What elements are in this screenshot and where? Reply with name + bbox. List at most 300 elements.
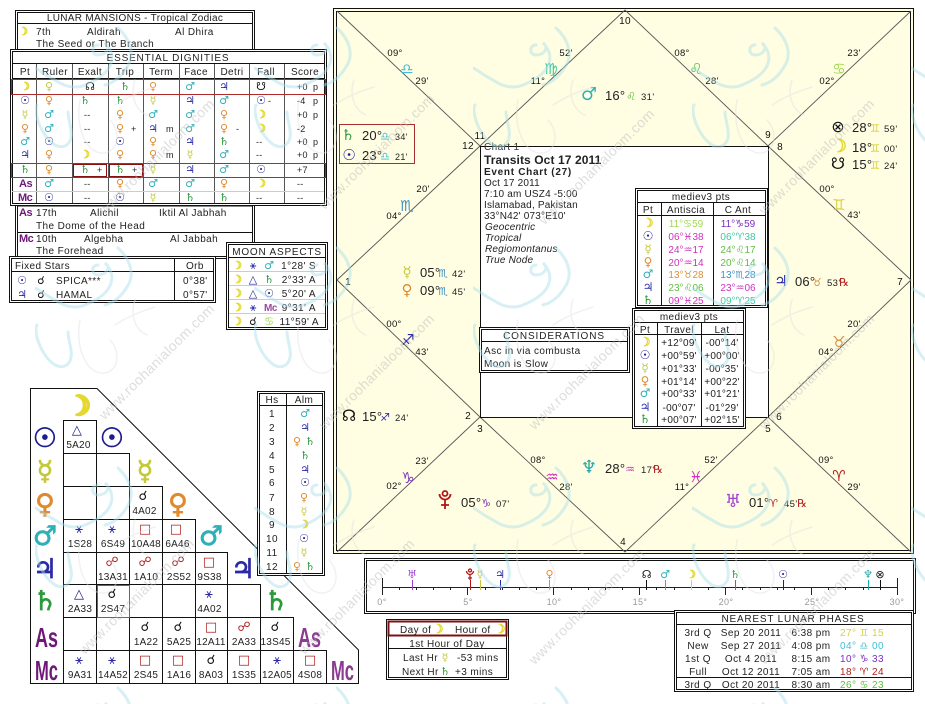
panel: nearest lunar phases (674, 610, 914, 692)
latitude values: -00°35' (706, 364, 738, 375)
cusp degrees: 02° (386, 481, 402, 492)
aspect symbols: ☍ (171, 555, 185, 570)
phase dates: Oct 20 2011 (722, 680, 780, 691)
panel: north indian chart (334, 8, 914, 554)
planet glyphs: diagonal labels: ☉ (100, 423, 124, 454)
scores and exalt dashes: +0 (297, 150, 308, 160)
planet column: ♀ (641, 374, 649, 388)
phase names: Full (689, 667, 707, 678)
aspect symbols: ☌ (174, 620, 182, 635)
chart subtitle: Event Chart (27) (484, 167, 572, 178)
planet: sun: 21' (395, 152, 408, 162)
axis labels: As (19, 178, 32, 190)
cusp degrees: 00° (819, 184, 835, 195)
last hour: ☿ (442, 651, 448, 664)
row: jupiter: ♀ (116, 148, 124, 161)
aspect values: 10A48 (131, 539, 161, 550)
planet: north node: ♐ (380, 411, 390, 424)
planet column: ☿ (644, 242, 652, 256)
antiscia values: 11°♋59 (669, 219, 704, 230)
planet: sun: ♎ (380, 150, 390, 163)
row: moon: ♂ (185, 80, 195, 93)
aspect rows: ♋ (264, 315, 274, 328)
planet: sun: 23° (362, 148, 382, 163)
planet: saturn: 34' (395, 132, 408, 142)
scores and exalt dashes: -- (84, 110, 90, 120)
antiscia values: 09°♓25 (668, 296, 704, 307)
event data: Islamabad, Pakistan (484, 200, 578, 211)
planet: part of fortune: ♊ (870, 122, 880, 135)
aspect symbols: ☌ (207, 653, 215, 668)
moon mansion: ☽ (18, 25, 28, 38)
house numbers: 7 (897, 277, 903, 288)
panel: essential dignities (10, 50, 326, 206)
antiscia values: 06°♓38 (668, 232, 704, 243)
chart settings: Regiomontanus (485, 244, 558, 255)
antiscia values: 13°♉28 (668, 270, 704, 281)
row: venus: ♀ (220, 122, 228, 135)
aspect symbols: ☌ (141, 620, 149, 635)
planet: saturn: ♎ (380, 130, 390, 143)
latitude values: +00°22' (704, 377, 740, 388)
row: jupiter: ♀ (45, 148, 53, 161)
aspect rows: ♂ (264, 259, 274, 272)
row: ascendant: ♂ (44, 177, 54, 190)
house numbers: 9 (765, 130, 771, 141)
fixed stars heading: Fixed Stars (15, 261, 70, 272)
panel: moon aspects (226, 242, 328, 330)
row: mercury: ♂ (44, 108, 54, 121)
aspect symbols: □ (139, 522, 151, 537)
planet: venus: ♏ (438, 285, 448, 298)
scores and exalt dashes: + (132, 165, 137, 175)
house numbers: 6 (776, 412, 782, 423)
planet: venus: ♀ (402, 281, 412, 299)
icon: pluto (440, 491, 450, 509)
phase dates: Sep 27 2011 (721, 641, 781, 652)
planet glyphs: row labels: ♄ (33, 586, 57, 617)
aspect values: 6A46 (165, 539, 190, 550)
scores and exalt dashes: +0 (297, 137, 308, 147)
planet column: ☉ (643, 229, 653, 243)
aspect orbs: 1°28' S (281, 261, 316, 272)
watermark: website address: www.roohanialoom.com (315, 310, 437, 433)
house numbers: 6 (269, 478, 275, 489)
planet glyphs: diagonal labels: ☽ (67, 391, 91, 422)
watermark: website address: www.roohanialoom.com (525, 545, 647, 668)
planet: neptune: ℞ (653, 463, 663, 476)
row: jupiter: ♂ (219, 148, 229, 161)
row: jupiter: ☿ (187, 148, 193, 161)
planet: north node: 15° (362, 409, 382, 424)
cusp degrees: 08° (530, 455, 546, 466)
row: midheaven: ♄ (219, 191, 229, 204)
aspect orbs: 5°20' A (282, 289, 316, 300)
watermark: website address: www.roohanialoom.com (755, 310, 877, 433)
cusp degrees: 09° (387, 48, 403, 59)
aspect symbols: ⚹ (273, 653, 281, 668)
chart title: Transits Oct 17 2011 (484, 153, 602, 167)
ruler planets: ☿ (477, 568, 483, 581)
aspect symbols: ☌ (139, 489, 147, 504)
label: Mc diagonal: Mc (331, 655, 354, 686)
row: mars: ♂ (20, 135, 30, 148)
row: mercury: ♀ (116, 108, 124, 121)
row: mercury: ♂ (185, 108, 195, 121)
planet column: ♄ (640, 412, 650, 426)
cusp signs: ♐ (401, 331, 415, 349)
row: saturn: ☿ (150, 163, 156, 176)
aspect rows: ☽ (232, 315, 242, 328)
antiscia values: 20°♒14 (668, 258, 704, 269)
day and hour rulers: ☽ (433, 622, 443, 636)
aspect values: 1S35 (232, 670, 256, 681)
cusp degrees: 52' (704, 455, 718, 466)
ruler scale labels: 15° (633, 597, 647, 607)
aspect symbols: ☌ (271, 620, 279, 635)
planet: part of fortune: ⊗ (831, 117, 845, 136)
next hour: Next Hr (402, 667, 439, 678)
scores and exalt dashes: -- (84, 179, 90, 189)
aspect values: 13A31 (98, 572, 128, 583)
row: saturn: ♃ (185, 163, 195, 176)
row: saturn: ♄ (80, 163, 90, 176)
house numbers: 8 (269, 507, 275, 518)
house rulers: ♄ (305, 560, 315, 573)
aspect values: 4S08 (298, 670, 322, 681)
row: moon: ♃ (219, 80, 229, 93)
column headings: Term (149, 67, 173, 78)
house rulers: ☉ (300, 476, 310, 489)
planet: south node: ☋ (831, 154, 845, 173)
aspect values: 5A20 (66, 440, 91, 451)
column headings: Face (184, 67, 208, 78)
next hour: ♄ (440, 665, 450, 678)
aspect values: 2S52 (167, 572, 191, 583)
house rulers: ☿ (301, 505, 307, 518)
aspect rows: ⚹ (250, 259, 257, 272)
antiscia headings: Pt (643, 205, 653, 216)
row: venus: ♃ (148, 122, 158, 135)
planet: part of fortune: 28° (852, 120, 872, 135)
house numbers: 5 (269, 465, 275, 476)
antiscia headings: Antiscia (667, 205, 705, 216)
aspect rows: ☽ (232, 259, 242, 272)
aspect rows: ☌ (249, 315, 257, 328)
ruler scale labels: 5° (463, 597, 473, 607)
last hour: Last Hr (403, 653, 438, 664)
aspect values: 1A16 (167, 670, 191, 681)
phase positions: 26° ♋ 23 (840, 680, 884, 691)
row: midheaven: ☉ (44, 191, 54, 204)
event data: 7:10 am USZ4 -5:00 (484, 189, 578, 200)
row: ascendant: ♂ (148, 177, 158, 190)
scores and exalt dashes: -- (256, 137, 262, 147)
ruler planets: ☽ (686, 568, 696, 581)
moon mansion: Al Dhira (175, 27, 214, 38)
row: sun: ☿ (150, 94, 156, 107)
panel: considerations (480, 328, 630, 372)
aspect orbs: 9°31' A (282, 303, 316, 314)
cusp signs: ♑ (401, 469, 415, 487)
aspect symbols: ☌ (108, 587, 116, 602)
almuten headings: Hs (265, 395, 279, 406)
aspect rows: △ (249, 287, 258, 300)
scores and exalt dashes: m (166, 124, 174, 134)
planet: north node: 24' (395, 413, 409, 424)
travel headings: Lat (714, 325, 730, 336)
midheaven mansion: Al Jabbah (170, 234, 218, 245)
planet: moon: 00' (884, 144, 898, 155)
cusp signs: ♈ (832, 467, 846, 485)
row: venus: ♂ (185, 122, 195, 135)
planet: uranus: ℞ (797, 497, 807, 510)
row: sun: ♄ (80, 94, 90, 107)
house rulers: ☉ (299, 532, 309, 545)
row: sun: ☉ (20, 94, 30, 107)
planet column: ☿ (641, 361, 649, 375)
column headings: Detri (220, 67, 244, 78)
house numbers: 4 (620, 537, 626, 548)
aspect values: 8A03 (199, 670, 223, 681)
star spica: ☉ (17, 274, 27, 287)
considerations notes: Asc in via combusta (484, 346, 581, 357)
row: saturn: ♄ (20, 163, 30, 176)
event data: Oct 17 2011 (484, 178, 540, 189)
contra-antiscia values: 06°♈38 (720, 232, 756, 243)
scores and exalt dashes: -2 (297, 124, 305, 134)
aspect symbols: □ (170, 522, 182, 537)
icon: ruler pluto (466, 569, 474, 580)
aspect symbols: □ (139, 653, 151, 668)
travel values: +01°14' (661, 377, 697, 388)
latitude values: +02°15' (704, 415, 740, 426)
scores and exalt dashes: -- (84, 137, 90, 147)
planet glyphs: diagonal labels: ♃ (231, 554, 255, 585)
aspect symbols: ☍ (105, 555, 119, 570)
watermark: website address: www.roohanialoom.com (75, 535, 197, 658)
planet: uranus: 01° (749, 495, 769, 510)
panel: lunar mansions (16, 10, 254, 258)
cusp degrees: 20' (847, 319, 861, 330)
row: ascendant: ♂ (185, 177, 195, 190)
cusp degrees: 52' (559, 48, 573, 59)
row: midheaven: ☉ (115, 191, 125, 204)
almuten headings: Alm (295, 395, 313, 406)
planet: mercury: ♏ (438, 267, 448, 280)
phase names: 1st Q (685, 654, 711, 665)
row: ascendant: ♀ (220, 177, 228, 190)
antiscia values: 24°♒17 (668, 245, 704, 256)
antiscia headings: C Ant (725, 205, 751, 216)
scores and exalt dashes: -- (297, 179, 303, 189)
star spica: 0°38' (183, 276, 208, 287)
phase dates: Sep 20 2011 (721, 628, 781, 639)
row: ascendant: ♀ (116, 177, 124, 190)
aspect rows: ♄ (264, 273, 274, 286)
planet: jupiter: 53' (827, 278, 841, 289)
dignities heading: ESSENTIAL DIGNITIES (107, 53, 229, 64)
ruler planets: ⊗ (875, 568, 885, 581)
moon mansion: The Seed or The Branch (36, 39, 154, 50)
ruler planets: ♆ (863, 568, 873, 581)
panel: antiscia table (636, 188, 768, 308)
aspect symbols: ⚹ (75, 653, 83, 668)
ruler scale labels: 20° (719, 597, 733, 607)
planet: mars: ♌ (626, 90, 636, 103)
ruler planets: ☊ (642, 568, 652, 581)
row: mars: ♃ (185, 135, 195, 148)
star hamal: 0°57' (183, 290, 208, 301)
house rulers: ♀ (293, 435, 301, 448)
planet: mercury: ☿ (402, 263, 412, 281)
planet: south node: 15° (852, 157, 872, 172)
column headings: Exalt (78, 67, 102, 78)
row: midheaven: ♄ (185, 191, 195, 204)
row: moon: ♀ (45, 80, 53, 93)
chart settings: Geocentric (485, 222, 535, 233)
star spica: ☌ (37, 274, 45, 287)
planet: part of fortune: 59' (884, 124, 898, 135)
phase dates: Oct 12 2011 (722, 667, 780, 678)
planet: pluto position: ♑ (481, 497, 491, 510)
travel title: mediev3 pts (660, 312, 718, 323)
aspect rows: ☽ (232, 287, 242, 300)
planet: mars: 16° (605, 88, 625, 103)
phase positions: 10° ♑ 33 (840, 654, 884, 665)
watermark: website address: www.roohanialoom.com (535, 105, 657, 228)
phase dates: Oct 4 2011 (725, 654, 777, 665)
aspect symbols: ☍ (237, 620, 251, 635)
ruler planets: ♀ (545, 568, 554, 581)
row: venus: ♀ (21, 122, 29, 135)
aspect values: 9A31 (68, 670, 92, 681)
cusp degrees: 28' (705, 76, 719, 87)
row: jupiter: ♀ (149, 148, 157, 161)
first hour note: 1st Hour of Day (409, 639, 485, 650)
ascendant mansion: Iktil Al Jabhah (159, 208, 227, 219)
planet: south node: 24' (884, 161, 898, 172)
scores and exalt dashes: -- (297, 193, 303, 203)
planet: jupiter: 06° (795, 274, 815, 289)
aspect rows: ☽ (232, 273, 242, 286)
planet column: ♀ (644, 255, 652, 269)
cusp signs: ♊ (832, 196, 846, 214)
cusp degrees: 20' (416, 184, 430, 195)
row: mercury: ♀ (220, 108, 228, 121)
house numbers: 1 (269, 409, 275, 420)
panel: degree ruler (364, 558, 916, 614)
row: mercury: ☿ (22, 108, 28, 121)
house rulers: ☿ (301, 546, 307, 559)
midheaven mansion: The Forehead (36, 246, 104, 257)
aspect rows: △ (249, 273, 258, 286)
row: venus: ☽ (256, 122, 266, 135)
row: ascendant: ☽ (256, 177, 266, 190)
row: saturn: ♄ (115, 163, 125, 176)
house numbers: 4 (269, 451, 275, 462)
day and hour rulers: ☽ (495, 622, 505, 636)
row: sun: ♀ (45, 94, 53, 107)
aspect values: 9S38 (197, 572, 222, 583)
planet column: ☽ (640, 335, 650, 349)
scores and exalt dashes: +7 (297, 165, 308, 175)
phase positions: 18° ♈ 24 (840, 667, 884, 678)
scores and exalt dashes: -- (84, 193, 90, 203)
aspect symbols: □ (205, 620, 217, 635)
scores and exalt dashes: p (313, 82, 318, 92)
next hour: +3 mins (455, 667, 493, 678)
aspect symbols: △ (72, 423, 82, 438)
scores and exalt dashes: - (268, 96, 271, 106)
house rulers: ♄ (305, 435, 315, 448)
aspect values: 14A52 (98, 670, 128, 681)
planet: mars: ♂ (581, 84, 597, 105)
house numbers: 10 (619, 16, 631, 27)
phase times: 7:05 am (792, 667, 830, 678)
phase names: New (687, 641, 709, 652)
watermark: website address: www.roohanialoom.com (755, 95, 877, 218)
scores and exalt dashes: + (131, 124, 136, 134)
aspect symbols: △ (74, 587, 84, 602)
panel: aspectarian (30, 388, 358, 686)
chart settings: True Node (485, 255, 534, 266)
contra-antiscia values: 11°♑59 (721, 219, 756, 230)
ruler scale labels: 0° (377, 597, 387, 607)
scores and exalt dashes: -4 (297, 96, 305, 106)
row: moon: ♄ (120, 80, 130, 93)
panel: chart details (480, 142, 768, 418)
planet glyphs: diagonal labels: ♄ (264, 586, 288, 617)
aspect values: 2S45 (134, 670, 158, 681)
watermark: website address: www.roohanialoom.com (295, 535, 417, 658)
midheaven mansion: Algebha (84, 234, 124, 245)
house numbers: 8 (777, 142, 783, 153)
house numbers: 12 (462, 141, 474, 152)
ruler planets: ♄ (730, 568, 740, 581)
cusp degrees: 43' (415, 347, 429, 358)
watermark: website address: www.roohanialoom.com (315, 90, 437, 213)
ruler scale labels: 10° (547, 597, 561, 607)
row: sun: ☉ (256, 94, 266, 107)
house numbers: 1 (345, 277, 351, 288)
scores and exalt dashes: p (313, 150, 318, 160)
watermark: website address: www.roohanialoom.com (95, 300, 217, 423)
aspect orbs: 11°59' A (279, 317, 319, 328)
planet: venus: 45' (452, 287, 466, 298)
planet column: ♂ (643, 267, 653, 281)
house rulers: ♃ (300, 421, 310, 434)
row: mars: ☉ (115, 135, 125, 148)
panel: planetary hours (386, 620, 508, 680)
planet: neptune: ♆ (581, 457, 597, 478)
planet glyphs: diagonal labels: ♂ (199, 521, 223, 552)
cusp degrees: 09° (818, 455, 834, 466)
cusp degrees: 11° (531, 76, 545, 87)
cusp degrees: 08° (674, 48, 690, 59)
ascendant mansion: 17th (36, 208, 57, 219)
contra-antiscia values: 23°♒06 (720, 283, 756, 294)
scores and exalt dashes: -- (256, 193, 262, 203)
saturn and sun callout (340, 124, 414, 164)
scores and exalt dashes: p (313, 110, 318, 120)
aspect values: 6S49 (101, 539, 125, 550)
scores and exalt dashes: m (166, 150, 174, 160)
watermark: website address: www.roohanialoom.com (95, 95, 217, 218)
planet column: ☽ (643, 216, 653, 230)
event data: 33°N42' 073°E10' (484, 211, 566, 222)
fixed stars heading: Orb (186, 261, 204, 272)
